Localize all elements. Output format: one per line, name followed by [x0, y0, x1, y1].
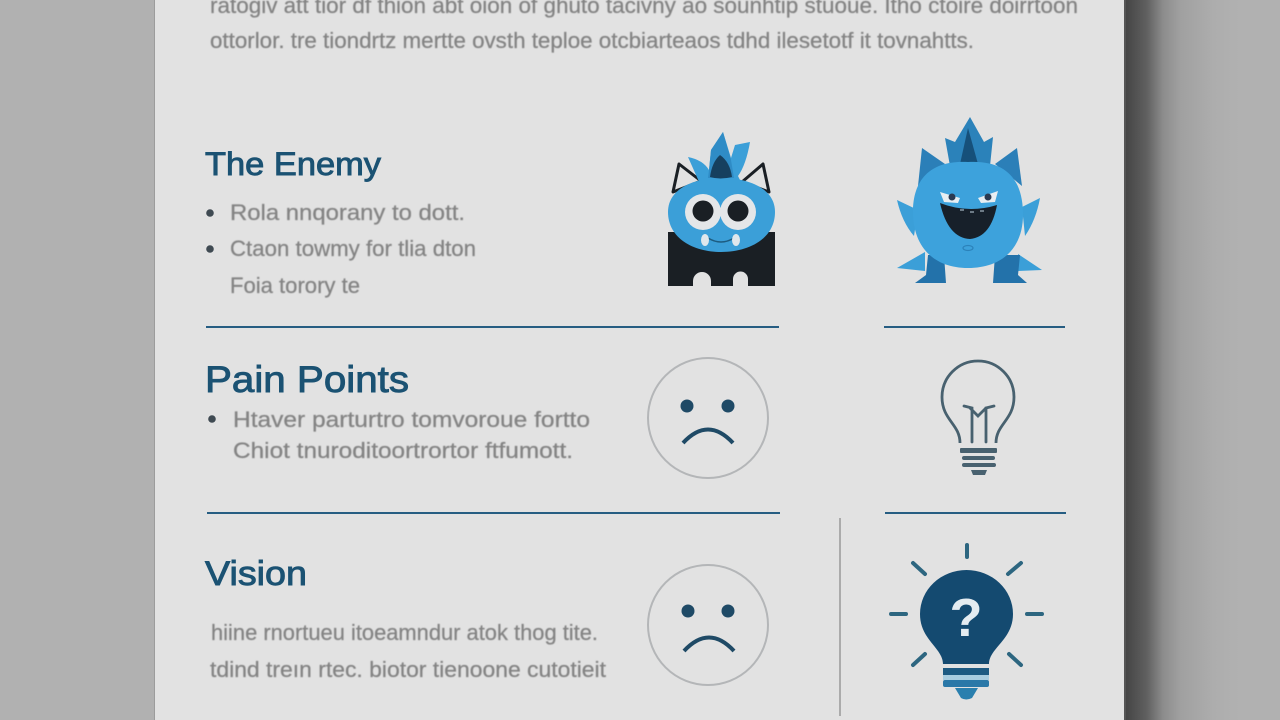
text block: Vision [210, 620, 606, 682]
intro text block: ottorlor. tre tiondrtz mertte ovsth teploe otcbiarteaos tdhd ilesetotf it tovnahtts. [210, 28, 974, 53]
panel: document page [155, 0, 1126, 720]
bullet list: Pain Points [208, 407, 590, 463]
icon: question mark light bulb: ? [950, 588, 982, 648]
icon: question mark light bulb [891, 545, 1042, 700]
text block: Vision: tdind treın rtec. biotor tienoone cutotieit [210, 657, 606, 682]
icon: sad face, vision [648, 565, 768, 685]
icon: spiky blue monster [897, 117, 1042, 283]
intro text block [210, 0, 1078, 53]
section: Pain Points [205, 359, 590, 463]
heading: The Enemy: The Enemy [205, 146, 381, 182]
bullet list: The Enemy: Rola nnqorany to dott. [230, 200, 465, 225]
bullet list: Pain Points: Htaver parturtro tomvoroue fortto [233, 407, 590, 432]
heading: Vision: Vision [205, 555, 307, 593]
bullet list: The Enemy: Ctaon towmy for tlia dton [230, 236, 476, 261]
bullet list: The Enemy: Foia torory te [230, 273, 360, 298]
heading: Pain Points: Pain Points [205, 359, 409, 400]
bullet list: The Enemy [206, 200, 476, 298]
icon: outline light bulb [942, 361, 1014, 475]
icon: sad face, pain points [648, 358, 768, 478]
icon: black and blue monster [668, 132, 775, 286]
text block: Vision: hiine rnortueu itoeamndur atok thog tite. [211, 620, 598, 645]
section: Vision [205, 555, 606, 682]
bullet list: Pain Points: Chiot tnuroditoortrortor ftfumott. [233, 438, 573, 463]
section: The Enemy [205, 146, 476, 298]
